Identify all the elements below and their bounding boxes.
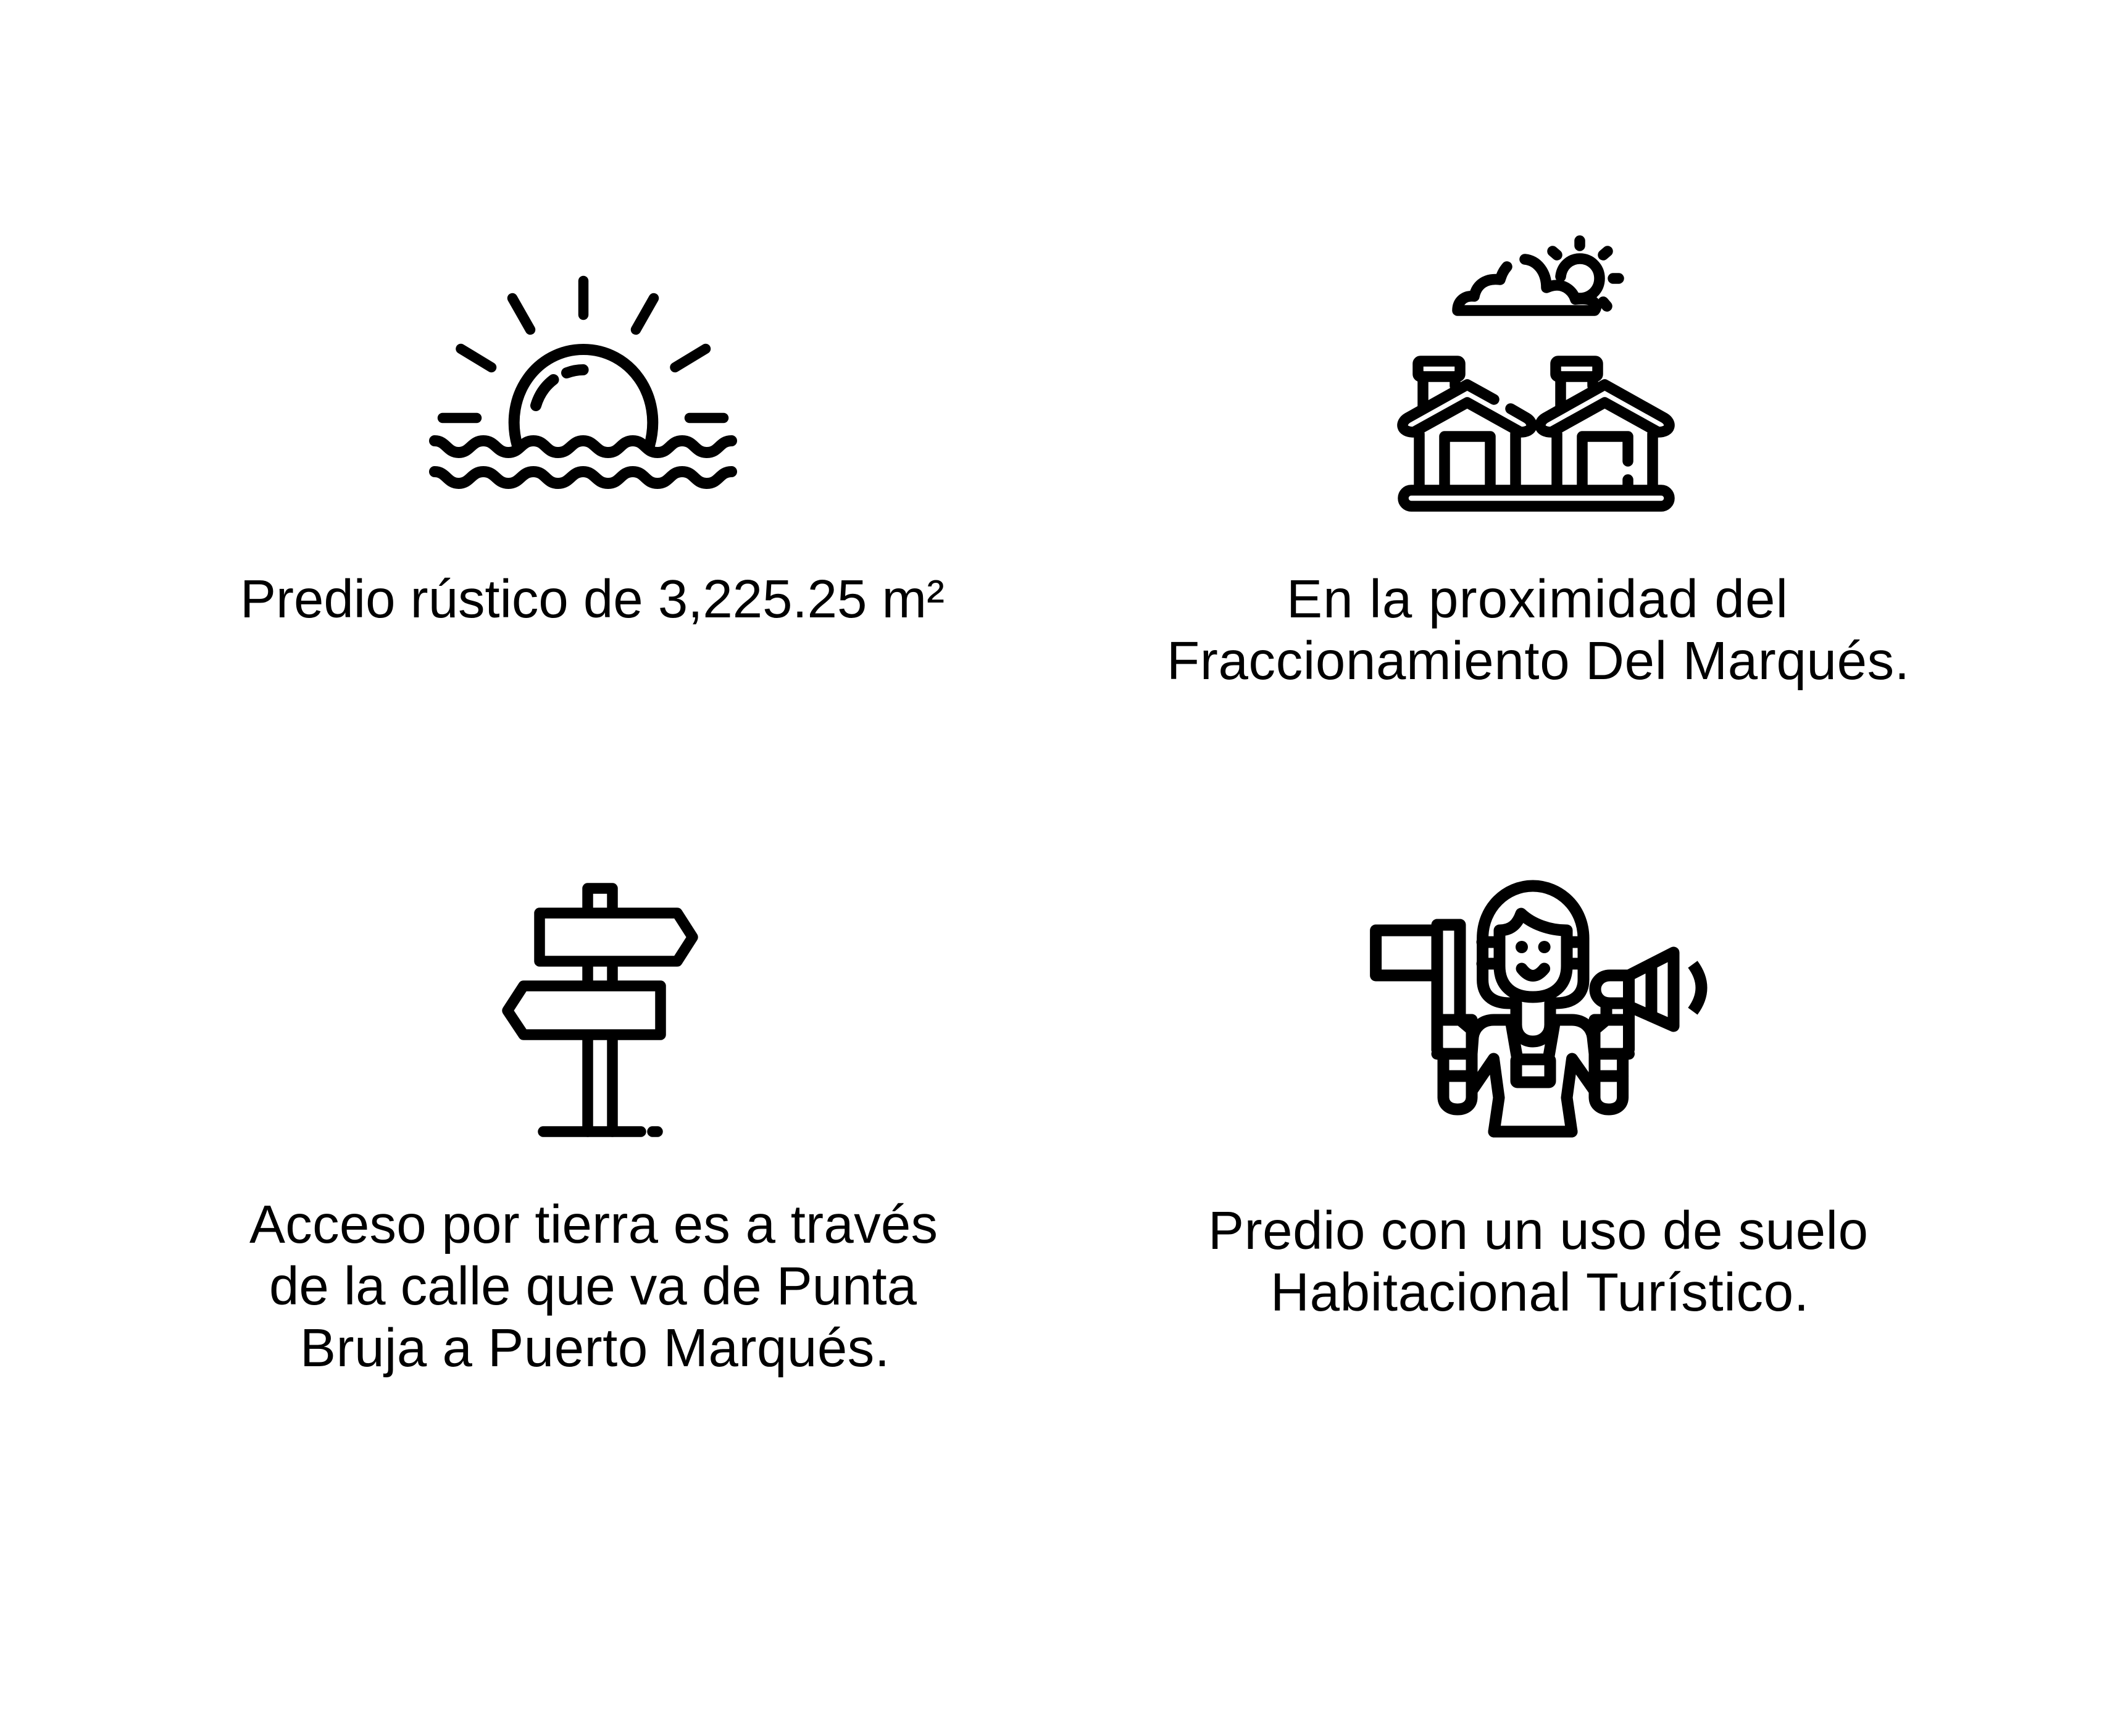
text: acceso — [249, 1195, 938, 1378]
text: fraccionamiento — [1167, 569, 1909, 691]
text: fraccionamiento: En la proximidad del — [1287, 569, 1788, 629]
panel: uso de suelo — [1208, 886, 1868, 1322]
text: predio rustico: Predio rústico de 3,225.25 m² — [240, 569, 945, 629]
icon: signpost — [507, 888, 693, 1132]
text: uso de suelo: Habitacional Turístico. — [1270, 1262, 1809, 1322]
text: acceso: de la calle que va de Punta — [269, 1256, 917, 1316]
icon: sun over waves — [435, 281, 732, 483]
text: uso de suelo — [1208, 1201, 1868, 1322]
panel: acceso — [249, 888, 938, 1378]
text: acceso: Acceso por tierra es a través — [249, 1195, 938, 1254]
panel: fraccionamiento — [1167, 241, 1909, 691]
icon: person with flag and megaphone — [1376, 886, 1701, 1132]
icon: houses with cloud and sun — [1403, 241, 1669, 506]
panel: predio rustico — [240, 281, 945, 629]
text: fraccionamiento: Fraccionamiento Del Marqués. — [1167, 631, 1909, 691]
text: uso de suelo: Predio con un uso de suelo — [1208, 1201, 1868, 1261]
text: acceso: Bruja a Puerto Marqués. — [300, 1318, 890, 1378]
